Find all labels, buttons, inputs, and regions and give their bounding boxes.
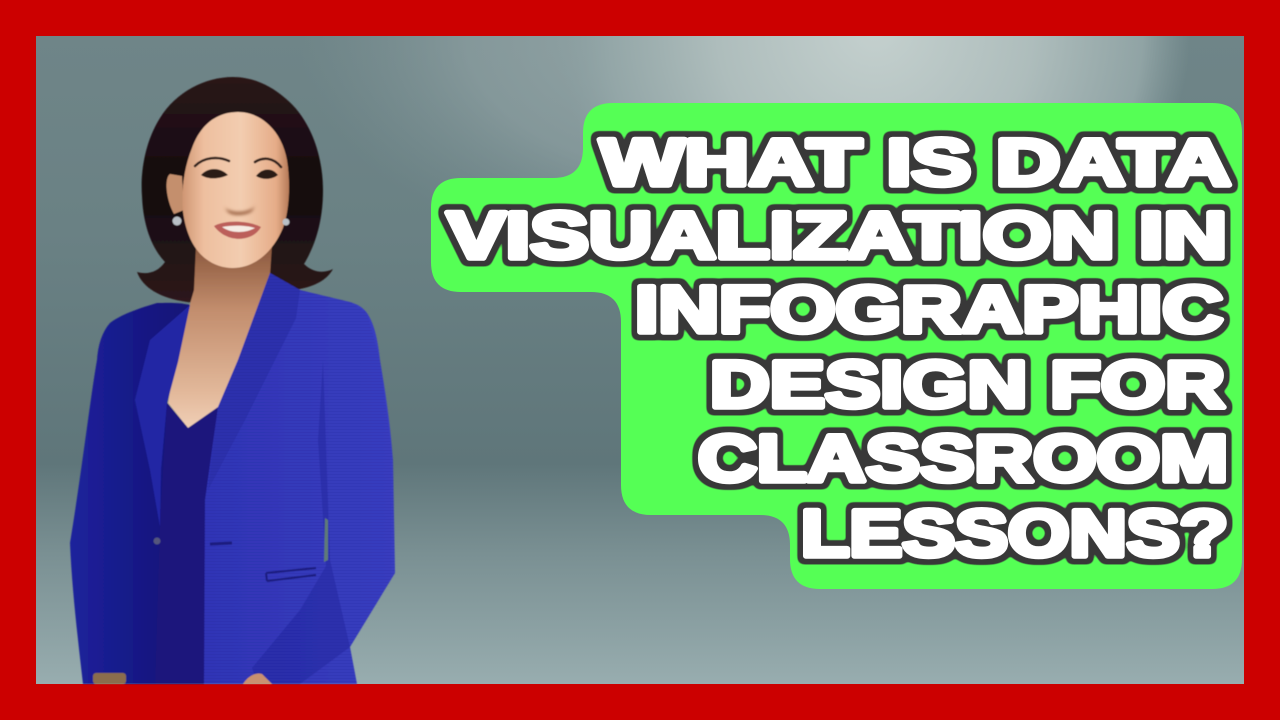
wristwatch [93, 673, 126, 684]
jacket left side [70, 303, 222, 684]
earrings [172, 216, 290, 226]
person: woman in blue blazer [70, 77, 395, 684]
pockets [210, 543, 316, 581]
left lapel [135, 305, 190, 527]
jacket button [154, 538, 160, 544]
neck and chest [168, 245, 272, 428]
hair [137, 77, 333, 303]
ear [167, 174, 184, 214]
fabric ribbing [204, 273, 395, 684]
right jacket front [204, 273, 395, 684]
gap between arm and body [324, 518, 328, 562]
title: VISUALIZATION IN [447, 198, 1227, 272]
title: INFOGRAPHIC [635, 272, 1223, 346]
green title panel [431, 103, 1242, 589]
hand [243, 673, 272, 684]
face [182, 112, 289, 268]
nose [224, 205, 256, 215]
title: CLASSROOM [698, 421, 1228, 495]
eyes [201, 169, 278, 179]
right lapel [208, 273, 300, 490]
sleeve shadow [252, 360, 350, 684]
inner top [155, 403, 218, 684]
eyebrows [195, 158, 281, 167]
title [447, 125, 1231, 570]
mouth [214, 222, 261, 239]
title: DESIGN FOR [710, 347, 1225, 421]
title: LESSONS? [801, 496, 1228, 570]
title: WHAT IS DATA [600, 125, 1231, 199]
